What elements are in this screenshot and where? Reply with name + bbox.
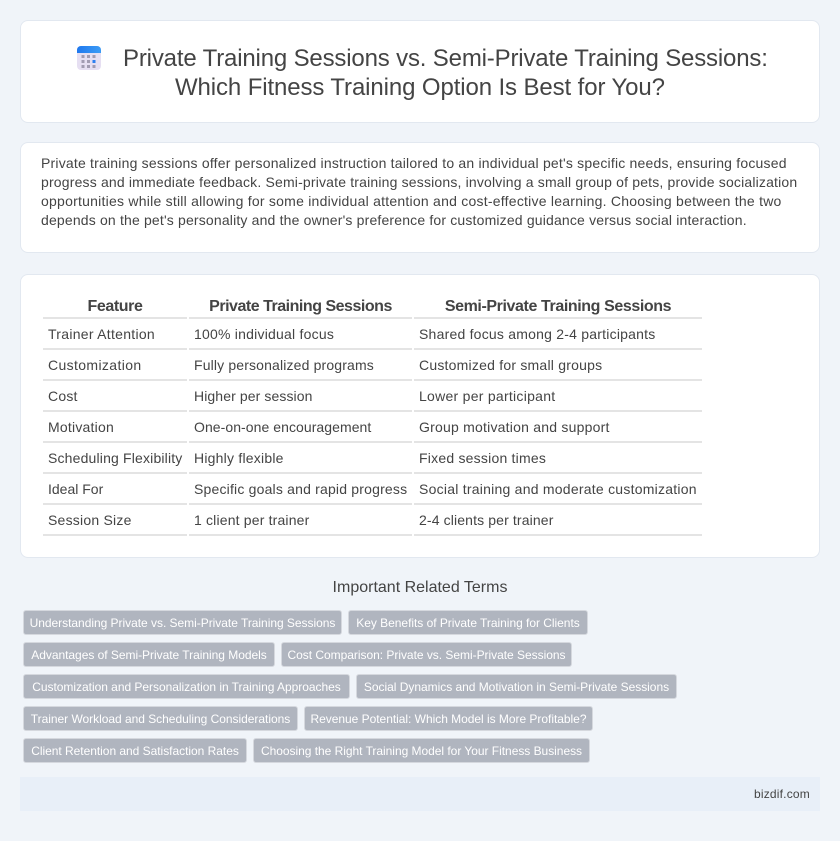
row: ideal for: Specific goals and rapid progress [194, 481, 407, 497]
chip: social dynamics: Social Dynamics and Motivation in Semi-Private Sessions [364, 680, 669, 694]
chip: client retention [23, 738, 247, 763]
title: Which Fitness Training Option Is Best for You? [175, 74, 665, 101]
row: motivation: Motivation [48, 419, 114, 435]
chip: understanding: Understanding Private vs. Semi-Private Training Sessions [30, 616, 335, 630]
row: scheduling flexibility [48, 450, 546, 466]
row: trainer attention: Shared focus among 2-4 participants [419, 326, 656, 342]
related terms heading: Important Related Terms [333, 579, 507, 596]
intro text: progress and immediate feedback. Semi-private training sessions, involving a small group of pets, provide socialization [41, 174, 797, 190]
row: cost [48, 388, 556, 404]
row: cost: Lower per participant [419, 388, 555, 404]
row: scheduling flexibility: Highly flexible [194, 450, 284, 466]
row: session size: 1 client per trainer [194, 512, 309, 528]
row: customization: Fully personalized programs [194, 357, 374, 373]
row: motivation: Group motivation and support [419, 419, 610, 435]
chip: advantages [23, 642, 275, 667]
chip: advantages: Advantages of Semi-Private Training Models [31, 648, 267, 662]
row: session size: Session Size [48, 512, 132, 528]
row: trainer attention: 100% individual focus [194, 326, 334, 342]
title [123, 45, 768, 101]
row: customization [48, 357, 602, 373]
chip: cost comparison [281, 642, 572, 667]
chip: understanding [23, 610, 342, 635]
row: trainer attention [48, 326, 656, 342]
row: customization: Customization [48, 357, 142, 373]
intro text: opportunities while still allowing for some individual attention and cost-effective learning. Choosing between the two [41, 193, 782, 209]
chip: client retention: Client Retention and Satisfaction Rates [31, 744, 239, 758]
row: motivation [48, 419, 610, 435]
panel: comparison table: Private Training Sessions [209, 298, 392, 315]
row: ideal for: Ideal For [48, 481, 103, 497]
panel: comparison table [20, 274, 820, 558]
chip: key benefits [348, 610, 588, 635]
intro text [41, 155, 797, 228]
chip: key benefits: Key Benefits of Private Training for Clients [356, 616, 580, 630]
chip: revenue: Revenue Potential: Which Model is More Profitable? [310, 712, 586, 726]
footer bar [20, 777, 820, 811]
chip: social dynamics [356, 674, 677, 699]
intro text: Private training sessions offer personalized instruction tailored to an individual pet's specific needs, ensuring focused [41, 155, 787, 171]
chip: choosing: Choosing the Right Training Model for Your Fitness Business [261, 744, 582, 758]
chip: customization [23, 674, 350, 699]
panel: title card [20, 20, 820, 123]
title: Private Training Sessions vs. Semi-Private Training Sessions: [123, 45, 768, 72]
row: trainer attention: Trainer Attention [48, 326, 155, 342]
row: scheduling flexibility: Scheduling Flexibility [48, 450, 182, 466]
panel: introduction [20, 142, 820, 253]
intro text: depends on the pet's personality and the owner's preference for customized guidance versus social interaction. [41, 212, 747, 228]
row: cost: Higher per session [194, 388, 313, 404]
row: ideal for [48, 481, 697, 497]
row: scheduling flexibility: Fixed session times [419, 450, 546, 466]
icon: calendar [77, 46, 101, 70]
row: cost: Cost [48, 388, 78, 404]
row: motivation: One-on-one encouragement [194, 419, 371, 435]
panel: comparison table: Semi-Private Training Sessions [445, 298, 671, 315]
row: session size: 2-4 clients per trainer [419, 512, 554, 528]
row: customization: Customized for small groups [419, 357, 602, 373]
chip: cost comparison: Cost Comparison: Private vs. Semi-Private Sessions [288, 648, 565, 662]
chip: customization: Customization and Personalization in Training Approaches [32, 680, 341, 694]
table header: Feature [88, 298, 142, 315]
chip: choosing [253, 738, 590, 763]
row: session size [48, 512, 554, 528]
chip: trainer workload [23, 706, 298, 731]
chip: trainer workload: Trainer Workload and Scheduling Considerations [31, 712, 290, 726]
footer text: bizdif.com [754, 787, 810, 801]
chip: revenue [304, 706, 593, 731]
row: ideal for: Social training and moderate customization [419, 481, 697, 497]
